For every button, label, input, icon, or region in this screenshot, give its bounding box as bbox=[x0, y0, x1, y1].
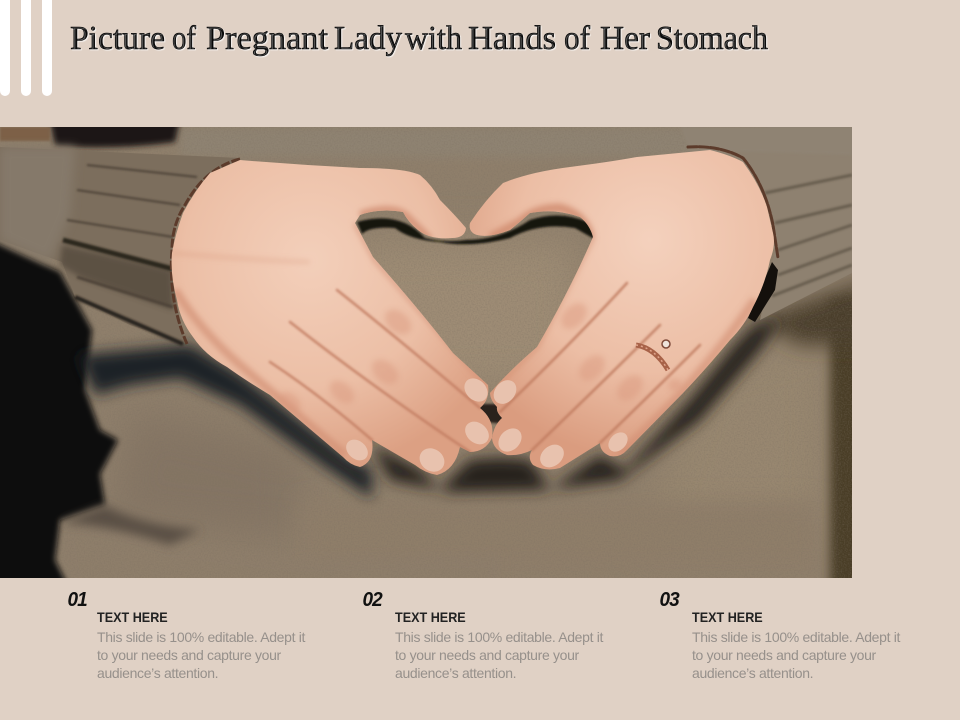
left hand shading bbox=[172, 210, 488, 455]
right sleeve bbox=[680, 127, 852, 322]
item 02 bbox=[363, 589, 604, 681]
right hand shading bbox=[490, 208, 755, 455]
title: Lady bbox=[334, 20, 402, 57]
wedding ring bbox=[636, 340, 670, 370]
title bbox=[70, 20, 769, 58]
item 02: TEXT HERE bbox=[395, 609, 466, 625]
item 03: audience’s attention. bbox=[692, 665, 813, 681]
title: Her bbox=[600, 20, 651, 57]
item 01: This slide is 100% editable. Adept it bbox=[97, 629, 305, 645]
item 01: to your needs and capture your bbox=[97, 647, 281, 663]
item 03: 03 bbox=[660, 589, 679, 611]
left cuff edge bbox=[171, 159, 240, 344]
photo: pregnant belly with heart-shaped hands bbox=[0, 127, 852, 578]
left sleeve bbox=[0, 147, 240, 344]
decorative white bars bbox=[0, 0, 52, 96]
title: Stomach bbox=[656, 20, 768, 57]
item 02: audience’s attention. bbox=[395, 665, 516, 681]
item 01 bbox=[68, 589, 306, 681]
item 03: This slide is 100% editable. Adept it bbox=[692, 629, 900, 645]
item 03 bbox=[508, 402, 900, 681]
item 01: TEXT HERE bbox=[97, 609, 168, 625]
item 01: audience’s attention. bbox=[97, 665, 218, 681]
title: of bbox=[564, 20, 591, 57]
sweater bbox=[0, 127, 870, 600]
title: Hands bbox=[468, 20, 556, 57]
item 03: TEXT HERE bbox=[692, 609, 763, 625]
right hand bbox=[470, 150, 774, 470]
shadow beneath hands bbox=[78, 215, 780, 498]
item 02: 02 bbox=[363, 589, 382, 611]
item 03: to your needs and capture your bbox=[692, 647, 876, 663]
right nails bbox=[494, 380, 628, 468]
left knuckles bbox=[283, 309, 412, 408]
item 01: 01 bbox=[68, 589, 87, 611]
title: Pregnant bbox=[206, 20, 329, 57]
title: of bbox=[172, 20, 197, 57]
right knuckles bbox=[560, 302, 680, 400]
left nails bbox=[346, 378, 489, 472]
item 02: This slide is 100% editable. Adept it bbox=[395, 629, 603, 645]
item 02: to your needs and capture your bbox=[395, 647, 579, 663]
left hand bbox=[172, 160, 492, 475]
title: with bbox=[405, 20, 462, 57]
title: Picture bbox=[70, 20, 165, 57]
dark background on left bbox=[0, 120, 200, 600]
